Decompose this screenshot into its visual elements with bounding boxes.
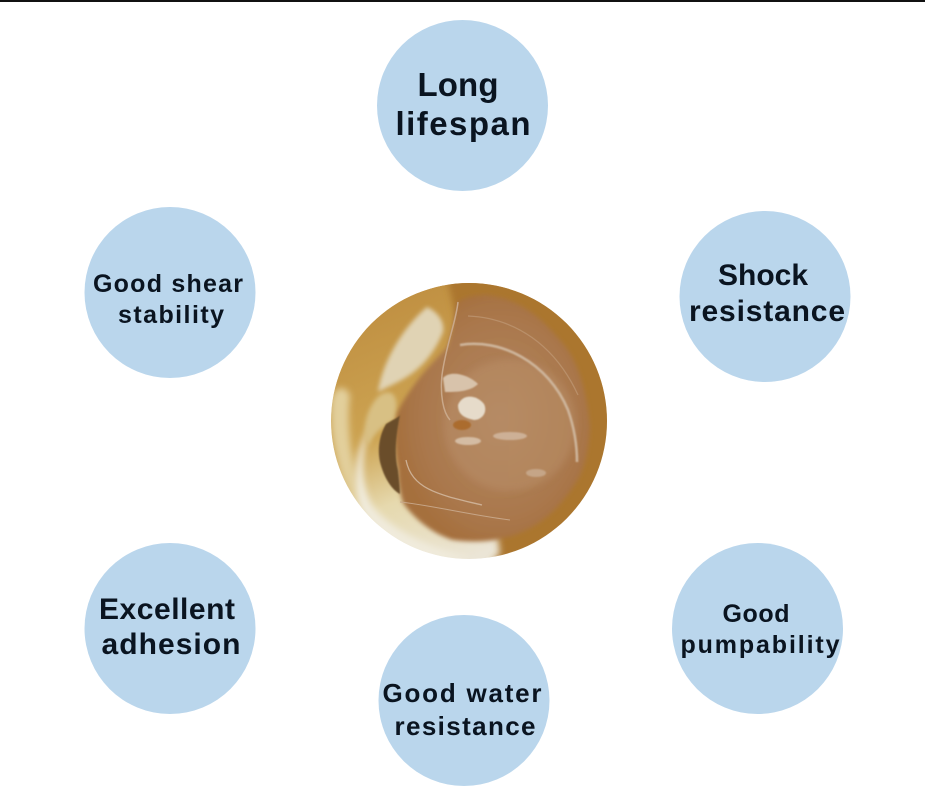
main grease body: [395, 295, 590, 542]
circle: good shear stability: stability: [118, 301, 224, 329]
circle: shock resistance: resistance: [689, 295, 845, 328]
circle: excellent adhesion: [84, 543, 256, 714]
circle: long lifespan: [377, 20, 548, 191]
lower swirl lines: [406, 460, 482, 505]
pale patch upper left: [378, 307, 443, 392]
circle: long lifespan: lifespan: [396, 105, 530, 142]
circle: good shear stability: Good shear: [93, 270, 243, 298]
white patch lower left: [352, 430, 450, 557]
inner dish shading: [444, 359, 576, 491]
pale glow on left edge: [331, 384, 370, 517]
circle: good shear stability: [84, 207, 256, 378]
circle: long lifespan: Long: [418, 66, 498, 103]
cream band beside crevice: [365, 392, 397, 445]
circle: good pumpability: [672, 543, 843, 714]
circle: excellent adhesion: Excellent: [99, 593, 235, 626]
central grease jar illustration: [331, 283, 607, 559]
circle: excellent adhesion: adhesion: [102, 628, 240, 661]
circle: good water resistance: resistance: [394, 711, 536, 741]
circle: good water resistance: [378, 615, 550, 786]
circle: good water resistance: Good water: [382, 678, 542, 708]
outer swirl highlight: [460, 344, 577, 462]
circle: shock resistance: Shock: [718, 259, 808, 292]
amber outer rim on right side: [444, 283, 607, 558]
top black border: [0, 0, 925, 2]
dark crevice: [379, 415, 400, 494]
circle: shock resistance: [680, 211, 850, 382]
circle: good pumpability: Good: [722, 600, 790, 628]
circle: good pumpability: pumpability: [680, 631, 840, 659]
central gloss highlights: [443, 374, 478, 392]
spoon swirl line: [441, 302, 458, 420]
upper swirl line: [468, 316, 578, 395]
